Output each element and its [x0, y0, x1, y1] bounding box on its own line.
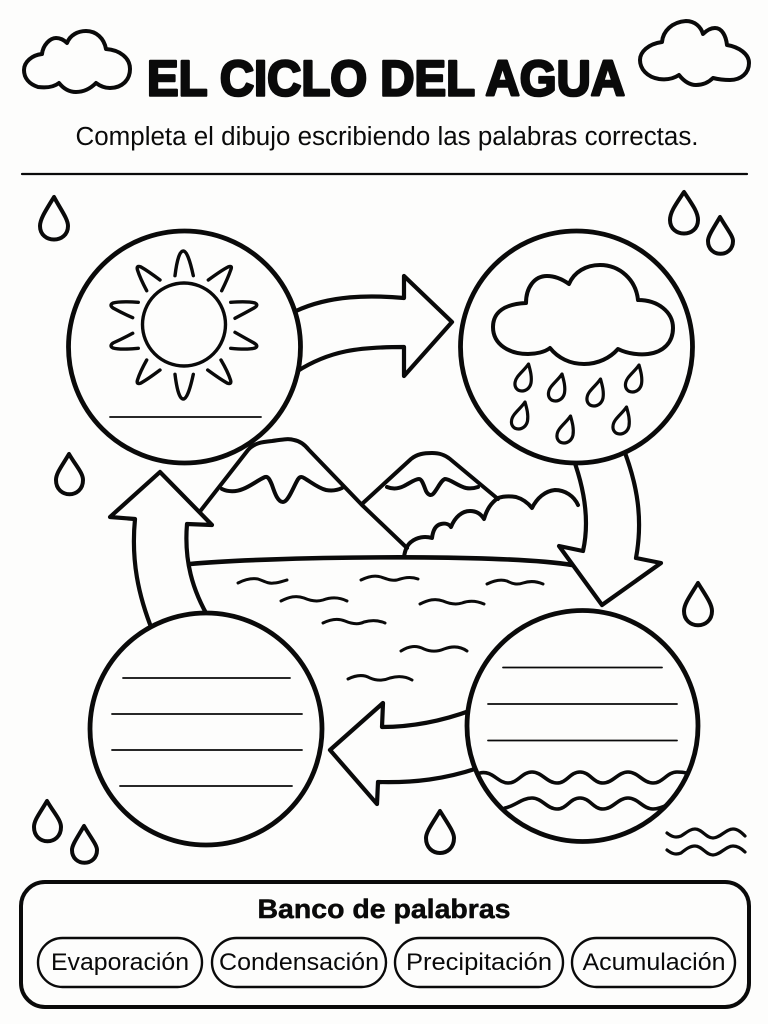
word chip: Acumulación: Acumulación	[582, 949, 726, 976]
panel: sun circle	[68, 231, 300, 463]
answer line	[110, 416, 261, 418]
arrow: collection to sun	[110, 472, 212, 632]
word bank heading: Banco de palabras	[258, 894, 510, 924]
icon: rain cloud	[493, 265, 673, 364]
word chip: Evaporación: Evaporación	[51, 949, 189, 976]
answer lines	[488, 668, 677, 740]
answer lines	[112, 678, 302, 786]
icon: rain drops	[511, 364, 642, 443]
panel: water circle	[467, 610, 698, 842]
word chip: Condensación	[212, 938, 386, 987]
arrow: cloud to water	[559, 445, 661, 605]
panel: rain circle	[460, 231, 692, 463]
word chip: Precipitación: Precipitación	[406, 949, 552, 976]
icon: waves bottom right	[667, 829, 745, 855]
subtitle: Completa el dibujo escribiendo las palabras correctas.	[76, 123, 698, 151]
water waves	[480, 772, 686, 809]
title: EL CICLO DEL AGUA	[147, 50, 625, 106]
scene: mountains, bushes and lake	[190, 439, 578, 565]
icon: cloud top left	[24, 31, 130, 92]
arrow: sun to cloud	[296, 276, 452, 376]
arrow: water to collection	[330, 703, 478, 804]
word chip: Precipitación	[395, 938, 563, 987]
word chip: Acumulación	[572, 938, 735, 987]
waves in lake	[238, 576, 543, 680]
word chip: Evaporación	[38, 938, 202, 987]
panel: word bank	[21, 882, 749, 1007]
panel: empty lined circle	[90, 613, 322, 845]
word chip: Condensación: Condensación	[219, 949, 379, 976]
icon: water drops	[34, 192, 733, 863]
icon: sun	[111, 251, 257, 399]
icon: cloud top right	[640, 21, 749, 85]
